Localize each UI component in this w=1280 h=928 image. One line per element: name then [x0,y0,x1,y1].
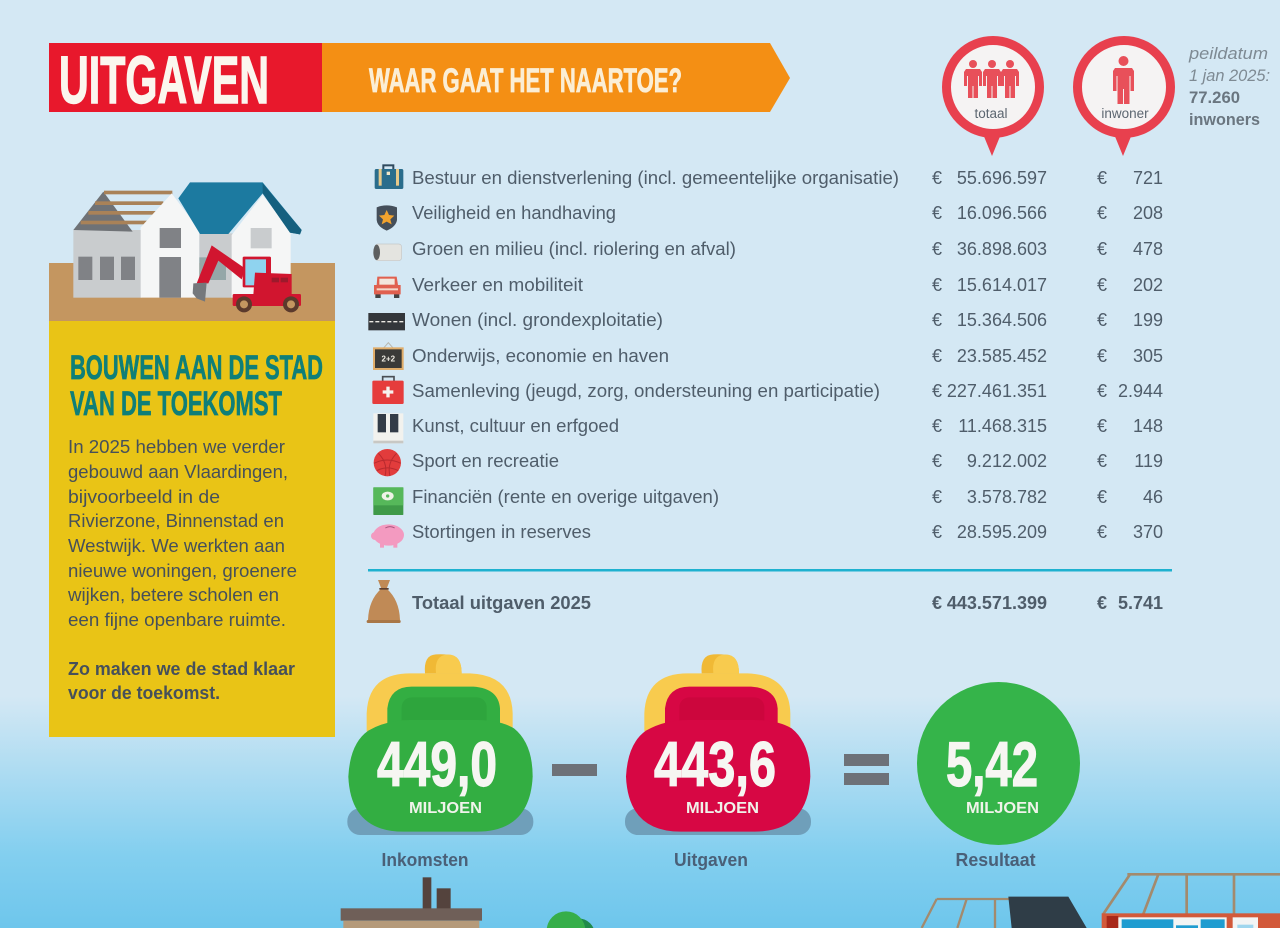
result circle: MILJOEN [966,800,1039,817]
table row: sport [374,449,1163,476]
table row: verkeer [374,274,1163,298]
table row: totaal: € [1097,593,1107,613]
table row: stortingen: € [1097,522,1107,542]
pin: inwoner: inwoner [1101,106,1149,121]
table row: financien [373,486,1163,515]
table row: financien: € [1097,487,1107,507]
table row: veiligheid: € [932,203,942,223]
table row: wonen: 15.364.506 [957,310,1047,330]
table row: sport: Sport en recreatie [412,450,559,471]
skyline: building right [1102,874,1280,928]
operator: equals [844,754,889,785]
panel body text: Westwijk. We werkten aan [68,536,285,556]
table row: samenleving [372,377,1163,404]
icon: piano keys [373,413,403,443]
table row: veiligheid: Veiligheid en handhaving [412,202,616,223]
icon: money bag [367,580,401,623]
icon: car [374,277,401,298]
table row: samenleving: € [1097,381,1107,401]
peildatum note [1188,45,1270,129]
table row: totaal: Totaal uitgaven 2025 [412,592,591,613]
peildatum note: 1 jan 2025: [1189,67,1270,85]
panel body text: bijvoorbeeld in de [68,487,220,507]
table row: wonen [368,309,1163,330]
peildatum note: peildatum [1188,45,1268,63]
table row: groen: Groen en milieu (incl. riolering en afval) [412,238,736,259]
table row: totaal [367,580,1163,623]
table row: totaal: 443.571.399 [947,593,1047,613]
title banner [49,43,790,118]
purse: uitgaven: 443,6 [654,730,776,800]
purse: inkomsten [347,654,533,835]
purse: uitgaven: MILJOEN [686,800,759,817]
icon: shield [377,205,397,231]
pin: inwoner [1078,40,1170,156]
icon: chalkboard: 2+2 [382,354,396,363]
label: resultaat: Resultaat [956,849,1036,870]
illustration: house and excavator [49,182,335,321]
table row: verkeer: 202 [1133,275,1163,295]
panel body text: gebouwd aan Vlaardingen, [68,462,288,482]
table row: sport: 9.212.002 [967,451,1047,471]
panel body text: een fijne openbare ruimte. [68,610,286,630]
purse: inkomsten: 449,0 [377,730,497,800]
panel body text: Rivierzone, Binnenstad en [68,511,284,531]
table row: kunst [373,413,1163,443]
table row: totaal: 5.741 [1118,593,1163,613]
panel body text [67,437,297,703]
peildatum note: 77.260 [1189,89,1240,107]
table row: bestuur: 721 [1133,168,1163,188]
table row: financien: 3.578.782 [967,487,1047,507]
table row: kunst: 11.468.315 [958,416,1047,436]
icon: chalkboard [374,343,403,369]
table row: sport: € [932,451,942,471]
table row: bestuur: € [1097,168,1107,188]
table row: wonen: Wonen (incl. grondexploitatie) [412,309,663,330]
table row: wonen: € [932,310,942,330]
table row: onderwijs: € [1097,346,1107,366]
table row: groen [373,238,1163,261]
table row: kunst: € [1097,416,1107,436]
table row: financien: € [932,487,942,507]
panel heading: BOUWEN AAN DE STAD [70,349,323,387]
panel body text: In 2025 hebben we verder [68,437,285,457]
table row: groen: € [932,239,942,259]
icon: piggy bank [371,524,404,548]
purse: uitgaven [625,654,811,835]
icon: banknotes [373,487,403,515]
table row: stortingen: 28.595.209 [957,522,1047,542]
panel: bouwen aan de stad [49,321,335,737]
table row: financien: 46 [1143,487,1163,507]
result circle: 5,42 [946,730,1038,800]
table row: verkeer: € [1097,275,1107,295]
panel body text: wijken, betere scholen en [67,585,279,605]
table row: bestuur: 55.696.597 [957,168,1047,188]
table row: veiligheid: 208 [1133,203,1163,223]
icon: road [368,313,405,330]
table row: financien: Financiën (rente en overige uitgaven) [412,486,719,507]
table row: verkeer: Verkeer en mobiliteit [412,274,583,295]
table row: veiligheid: 16.096.566 [957,203,1047,223]
table row: verkeer: 15.614.017 [957,275,1047,295]
panel body text: Zo maken we de stad klaar [68,659,295,679]
table row: groen: € [1097,239,1107,259]
icon: first aid kit [372,377,404,404]
table row: bestuur [375,165,1163,189]
title banner: UITGAVEN [59,43,269,118]
peildatum note: inwoners [1189,111,1260,129]
icon: briefcase [375,165,403,189]
result circle [917,682,1080,845]
skyline: tree [547,911,595,928]
table row: sport: 119 [1134,451,1163,471]
label: uitgaven: Uitgaven [674,849,748,870]
table row: kunst: € [932,416,942,436]
icon: ball [374,449,401,476]
table row: samenleving: 227.461.351 [947,381,1047,401]
table row: bestuur: Bestuur en dienstverlening (incl. gemeentelijke organisatie) [412,167,899,188]
table row: onderwijs [374,343,1163,369]
table row: veiligheid [377,202,1163,231]
operator: minus [552,764,597,776]
panel heading: VAN DE TOEKOMST [70,385,282,423]
skyline: building left [341,877,482,928]
table row: samenleving: € [932,381,942,401]
panel body text: nieuwe woningen, groenere [68,561,297,581]
table row: onderwijs: 23.585.452 [957,346,1047,366]
panel heading [70,349,323,423]
pin: totaal [946,40,1040,156]
table row: veiligheid: € [1097,203,1107,223]
table row: stortingen: 370 [1133,522,1163,542]
table row: bestuur: € [932,168,942,188]
table row: kunst: 148 [1133,416,1163,436]
table row: totaal: € [932,593,942,613]
label: inkomsten: Inkomsten [382,849,468,870]
table row: samenleving: Samenleving (jeugd, zorg, ondersteuning en participatie) [412,380,880,401]
table row: samenleving: 2.944 [1118,381,1163,401]
table row: kunst: Kunst, cultuur en erfgoed [412,415,619,436]
table row: wonen: € [1097,310,1107,330]
table row: sport: € [1097,451,1107,471]
table row: groen: 478 [1133,239,1163,259]
table row: groen: 36.898.603 [957,239,1047,259]
table row: wonen: 199 [1133,310,1163,330]
table row: onderwijs: € [932,346,942,366]
table row: stortingen: Stortingen in reserves [412,521,591,542]
title banner: WAAR GAAT HET NAARTOE? [369,62,682,100]
table row: stortingen: € [932,522,942,542]
icon: pipe [373,244,402,261]
table row: verkeer: € [932,275,942,295]
table row: stortingen [371,521,1163,548]
skyline: roof frame [922,897,1087,928]
table row: onderwijs: 305 [1133,346,1163,366]
panel body text: voor de toekomst. [68,683,220,703]
purse: inkomsten: MILJOEN [409,800,482,817]
pin: totaal: totaal [974,106,1008,121]
table row: onderwijs: Onderwijs, economie en haven [412,345,669,366]
